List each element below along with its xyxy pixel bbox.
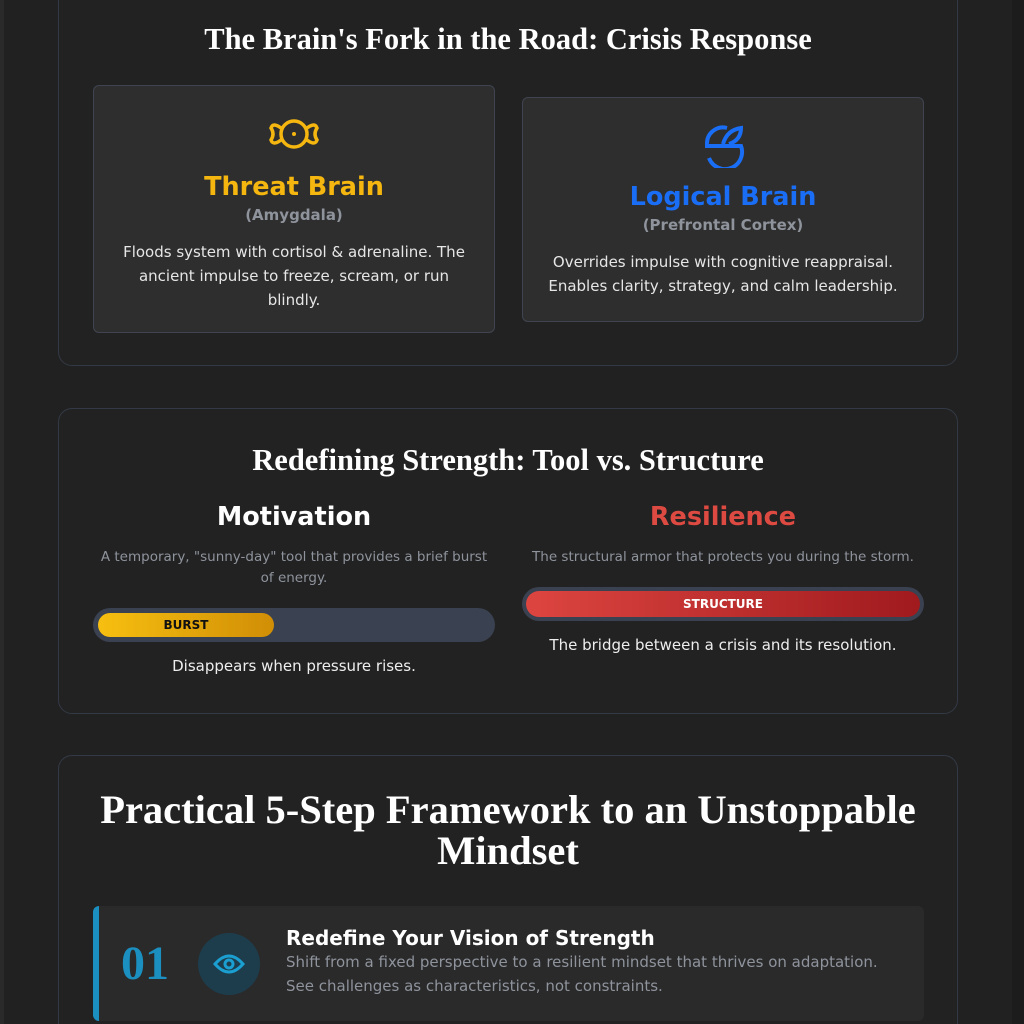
step text: Shift from a fixed perspective to a resilient mindset that thrives on adaptation. See challenges as characteristics, not constraints.: [286, 953, 878, 995]
column: resilience: Resilience: [650, 502, 796, 532]
card: logical brain: Logical Brain: [630, 182, 816, 212]
card: threat brain: Floods system with cortisol & adrenaline. The ancient impulse to freeze, scream, or run blindly.: [123, 243, 465, 309]
card: logical brain: (Prefrontal Cortex): [643, 216, 803, 234]
column: motivation: [93, 502, 495, 675]
panel: framework: [58, 755, 958, 1024]
heading: framework: Mindset: [437, 828, 579, 873]
bar: burst: BURST: [164, 618, 208, 632]
column: motivation: Motivation: [217, 502, 371, 532]
card: threat brain: [93, 85, 495, 333]
column: resilience: The bridge between a crisis and its resolution.: [549, 636, 897, 654]
card: threat brain: (Amygdala): [245, 206, 343, 224]
panel: crisis response: [58, 0, 958, 366]
icon: logical brain: [705, 125, 744, 168]
icon: threat brain: [269, 119, 319, 149]
heading: crisis response: The Brain's Fork in the Road: Crisis Response: [204, 22, 812, 56]
number 01: 01: [121, 937, 169, 990]
column: motivation: A temporary, "sunny-day" tool that provides a brief burst of energy.: [101, 549, 487, 586]
card: threat brain: Threat Brain: [204, 172, 384, 202]
step 01: [93, 906, 924, 1021]
panel: tool vs structure: [58, 408, 958, 714]
column: resilience: The structural armor that protects you during the storm.: [532, 549, 914, 565]
card: logical brain: [522, 97, 924, 322]
heading: framework: Practical 5-Step Framework to an Unstoppable: [100, 787, 916, 832]
bar: structure: STRUCTURE: [683, 597, 763, 611]
column: motivation: Disappears when pressure rises.: [172, 657, 416, 675]
column: resilience: [522, 502, 924, 654]
bar: structure: [522, 587, 924, 621]
heading: framework: [100, 787, 916, 873]
card: logical brain: Overrides impulse with cognitive reappraisal. Enables clarity, strategy, and calm leadership.: [548, 253, 898, 295]
icon: eye: [198, 933, 260, 995]
step text: [286, 926, 878, 995]
heading: redefining strength: Redefining Strength: Tool vs. Structure: [252, 443, 764, 477]
bar: burst: [93, 608, 495, 642]
step text: Redefine Your Vision of Strength: [286, 926, 655, 950]
